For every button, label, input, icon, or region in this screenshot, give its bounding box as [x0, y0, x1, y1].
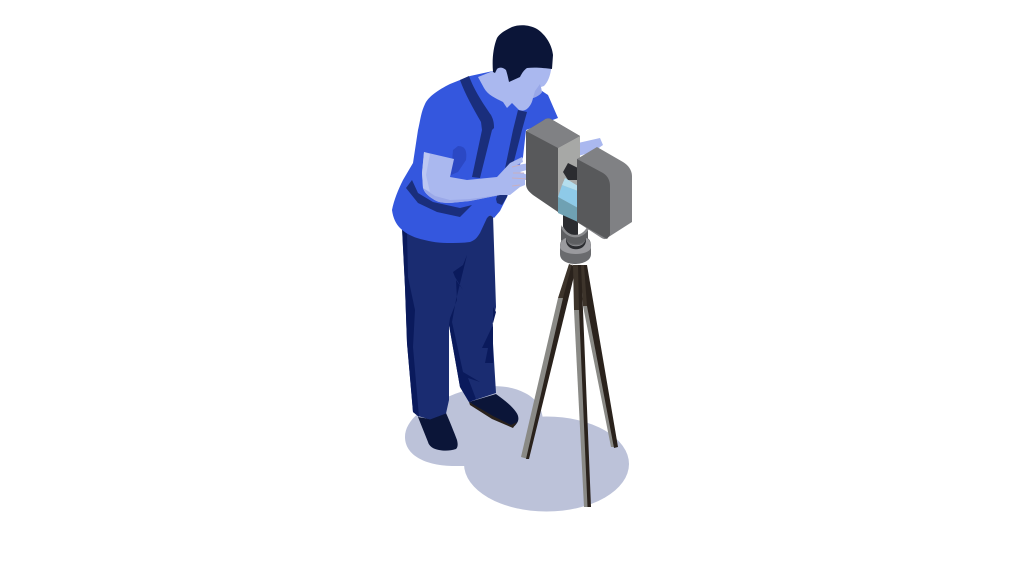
arm — [422, 152, 533, 203]
shirt pocket crease — [451, 146, 466, 175]
shoe: left — [418, 413, 458, 451]
person legs — [402, 215, 518, 451]
scanner right block — [577, 147, 632, 239]
forearm underside — [423, 188, 500, 203]
tripod — [521, 264, 618, 507]
trouser shadow — [402, 228, 419, 417]
shoe: right — [469, 394, 518, 427]
tripod leg: left — [521, 264, 575, 459]
ground shadows — [405, 386, 629, 512]
scanner left block — [526, 118, 580, 212]
tripod leg: right — [580, 265, 618, 448]
scanner glass — [558, 185, 578, 208]
laser scanner — [526, 118, 632, 239]
scanner rotor — [563, 163, 578, 180]
far hand — [578, 138, 603, 156]
sleeve highlight — [422, 152, 430, 192]
neck and face — [478, 60, 551, 111]
hair — [493, 25, 553, 82]
tripod leg: centre — [573, 265, 591, 507]
tripod head — [560, 215, 591, 264]
collar trim left — [460, 76, 494, 178]
fingers — [512, 165, 528, 186]
scanner centre — [558, 136, 580, 222]
hem trim — [406, 180, 472, 217]
trousers — [402, 215, 496, 420]
nose shadow — [533, 84, 542, 98]
placket trim right — [496, 110, 527, 205]
shirt — [392, 71, 558, 243]
shirt dark trim — [406, 76, 527, 217]
